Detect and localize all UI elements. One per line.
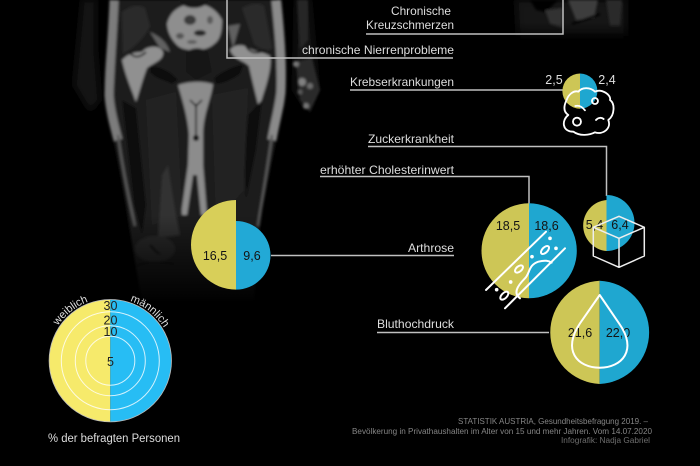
pie: Cholesterin 18,5 / 18,6 with artery icon: 18,6: [534, 219, 559, 233]
source note: Bevölkerung in Privathaushalten im Alter von 15 und mehr Jahren. Vom 14.07.2020: [352, 426, 652, 436]
MRI scan fragment top right: [505, 0, 635, 48]
MRI scan of pelvis and thighs: [60, 0, 340, 305]
label: chronische Nierrenprobleme: [227, 0, 454, 58]
pie: Cholesterin 18,5 / 18,6 with artery icon: 18,5: [496, 219, 520, 233]
label: Chronische Kreuzschmerzen: Chronische: [391, 4, 451, 18]
pie: Zuckerkrankheit 5,4 / 6,4 with sugar cube icon: 6,4: [611, 218, 629, 232]
legend: [48, 296, 180, 445]
pie: Zuckerkrankheit 5,4 / 6,4 with sugar cube icon: [583, 195, 644, 267]
legend scale values: 30: [104, 299, 117, 313]
legend label weiblich: weiblich: [53, 296, 88, 324]
pie: Kreuzschmerzen 16,5 / 9,6: 16,5: [203, 249, 227, 263]
label: Arthrose: Arthrose: [408, 241, 454, 255]
legend scale values: 5: [107, 355, 114, 369]
pie: Krebserkrankungen 2,5 / 2,4 with tumor icon: 2,5: [545, 73, 563, 87]
pie: Cholesterin 18,5 / 18,6 with artery icon: [482, 203, 577, 308]
source note: [352, 416, 652, 445]
legend caption: % der befragten Personen: [48, 433, 180, 445]
label: Zuckerkrankheit: Zuckerkrankheit: [368, 132, 455, 146]
label: Chronische Kreuzschmerzen: Kreuzschmerzen: [366, 18, 454, 32]
label: chronische Nierrenprobleme: chronische Nierrenprobleme: [302, 43, 454, 57]
pie: Krebserkrankungen 2,5 / 2,4 with tumor icon: 2,4: [598, 73, 616, 87]
legend scale values: [104, 299, 117, 369]
label: erhöhter Cholesterinwert: erhöhter Cholesterinwert: [320, 163, 455, 177]
pie: Bluthochdruck 21,6 / 22,0 with drop icon: [550, 281, 649, 384]
pie: Kreuzschmerzen 16,5 / 9,6: [191, 200, 270, 290]
label: Bluthochdruck: Bluthochdruck: [377, 317, 455, 331]
pie: Zuckerkrankheit 5,4 / 6,4 with sugar cube icon: 5,4: [586, 218, 603, 232]
label: erhöhter Cholesterinwert: [320, 163, 529, 204]
source note: Infografik: Nadja Gabriel: [561, 435, 650, 445]
pie: Krebserkrankungen 2,5 / 2,4 with tumor icon: [545, 73, 616, 135]
label: Chronische Kreuzschmerzen: [366, 0, 563, 34]
legend label männlich: männlich: [130, 296, 168, 328]
legend circle: [49, 300, 171, 422]
icon: blood drop: [572, 295, 627, 368]
icon: tumor cloud: [564, 88, 614, 135]
legend scale values: 10: [104, 325, 117, 339]
source note: STATISTIK AUSTRIA, Gesundheitsbefragung 2019. –: [458, 416, 648, 426]
label: Krebserkrankungen: Krebserkrankungen: [350, 75, 454, 89]
pie: Kreuzschmerzen 16,5 / 9,6: 9,6: [243, 249, 261, 263]
icon: clogged artery: [486, 232, 565, 308]
icon: sugar cube: [593, 216, 644, 267]
pie: Bluthochdruck 21,6 / 22,0 with drop icon: 22,0: [606, 326, 630, 340]
pie: Bluthochdruck 21,6 / 22,0 with drop icon: 21,6: [568, 326, 592, 340]
label: Zuckerkrankheit: [368, 132, 606, 196]
legend scale values: 20: [104, 314, 117, 328]
